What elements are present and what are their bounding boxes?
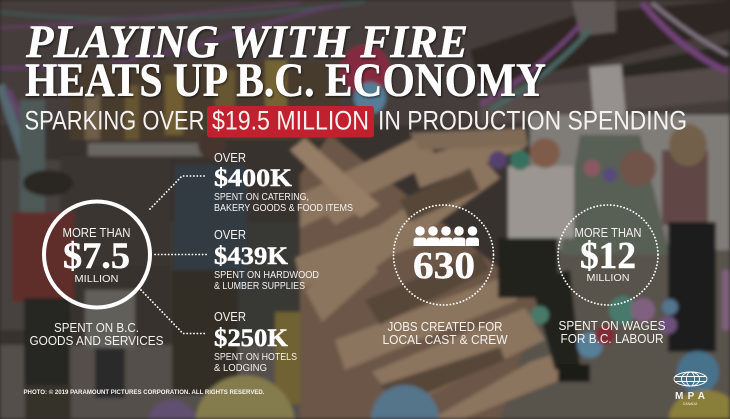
ceiling bbox=[0, 0, 730, 125]
person: child centre bbox=[85, 290, 135, 348]
man: grey shirt, centre right bbox=[508, 166, 574, 238]
stat: $250K hotels: OVER bbox=[214, 310, 246, 324]
stat: $439K lumber bbox=[214, 228, 319, 292]
caption: goods and services bbox=[30, 320, 164, 348]
shelf yellow boxes right bbox=[275, 312, 337, 404]
title: PLAYING WITH FIRE bbox=[25, 16, 468, 68]
stat: $250K hotels: $250K bbox=[214, 325, 289, 352]
circle: $7.5 million bbox=[44, 202, 150, 308]
photo credit: PHOTO: © 2019 PARAMOUNT PICTURES CORPORATION. ALL RIGHTS RESERVED. bbox=[24, 388, 265, 396]
stat: $400K catering: OVER bbox=[214, 151, 246, 165]
circle: $12 million bbox=[558, 205, 658, 305]
stat: $439K lumber: & LUMBER SUPPLIES bbox=[214, 281, 305, 292]
caption: jobs created bbox=[382, 319, 508, 347]
title: HEATS UP B.C. ECONOMY bbox=[25, 54, 546, 107]
logo: MPA Canada: MPA bbox=[675, 391, 705, 402]
person: child with helmet bbox=[12, 212, 74, 302]
title bbox=[25, 16, 546, 107]
stat: $439K lumber: $439K bbox=[214, 243, 289, 270]
back wall right bbox=[530, 115, 730, 250]
stat: $400K catering: $400K bbox=[214, 165, 293, 192]
circle: 630 jobs: 630 bbox=[413, 245, 475, 287]
stat: $439K lumber: SPENT ON HARDWOOD bbox=[214, 270, 319, 281]
streamers bbox=[0, 2, 728, 200]
balloons bbox=[195, 375, 295, 419]
stat: $250K hotels bbox=[214, 310, 297, 374]
subtitle with highlight: $19.5 MILLION bbox=[212, 106, 369, 136]
caption: wages: FOR B.C. LABOUR bbox=[560, 331, 664, 346]
circle: 630 jobs bbox=[394, 205, 494, 305]
subtitle with highlight: IN PRODUCTION SPENDING bbox=[378, 106, 687, 136]
stat: $250K hotels: SPENT ON HOTELS bbox=[214, 352, 297, 363]
caption: wages bbox=[558, 318, 666, 346]
caption: goods and services: SPENT ON B.C. bbox=[54, 320, 139, 335]
logo: MPA Canada bbox=[674, 372, 707, 406]
woman at right bbox=[662, 150, 708, 225]
caption: wages: SPENT ON WAGES bbox=[558, 318, 666, 333]
subtitle with highlight: SPARKING OVER bbox=[24, 106, 204, 136]
caption: jobs created: LOCAL CAST & CREW bbox=[382, 332, 508, 347]
circle: $12 million: MORE THAN bbox=[574, 226, 642, 240]
shelves with boxes bbox=[70, 62, 340, 140]
circle: $7.5 million: MORE THAN bbox=[62, 226, 130, 240]
logo: MPA Canada: CANADA bbox=[683, 402, 698, 406]
caption: jobs created: JOBS CREATED FOR bbox=[388, 319, 502, 334]
stat: $400K catering: SPENT ON CATERING, bbox=[214, 192, 309, 203]
circle: $7.5 million: MILLION bbox=[74, 273, 118, 285]
circle: $12 million: $12 bbox=[580, 235, 636, 277]
dotted connectors bbox=[141, 176, 209, 334]
stat: $439K lumber: OVER bbox=[214, 228, 246, 242]
person: man in dark clothes left of pile bbox=[175, 165, 247, 290]
icon: row of people bbox=[414, 226, 479, 246]
subtitle with highlight bbox=[24, 106, 687, 138]
caption: goods and services: GOODS AND SERVICES bbox=[30, 333, 164, 348]
circle: $12 million: MILLION bbox=[586, 272, 630, 284]
stat: $400K catering bbox=[214, 151, 353, 214]
lumber pile bbox=[300, 135, 540, 419]
stat: $250K hotels: & LODGING bbox=[214, 363, 267, 374]
floor bbox=[0, 345, 420, 419]
circle: $7.5 million: $7.5 bbox=[63, 236, 130, 277]
stat: $400K catering: BAKERY GOODS & FOOD ITEMS bbox=[214, 203, 353, 214]
